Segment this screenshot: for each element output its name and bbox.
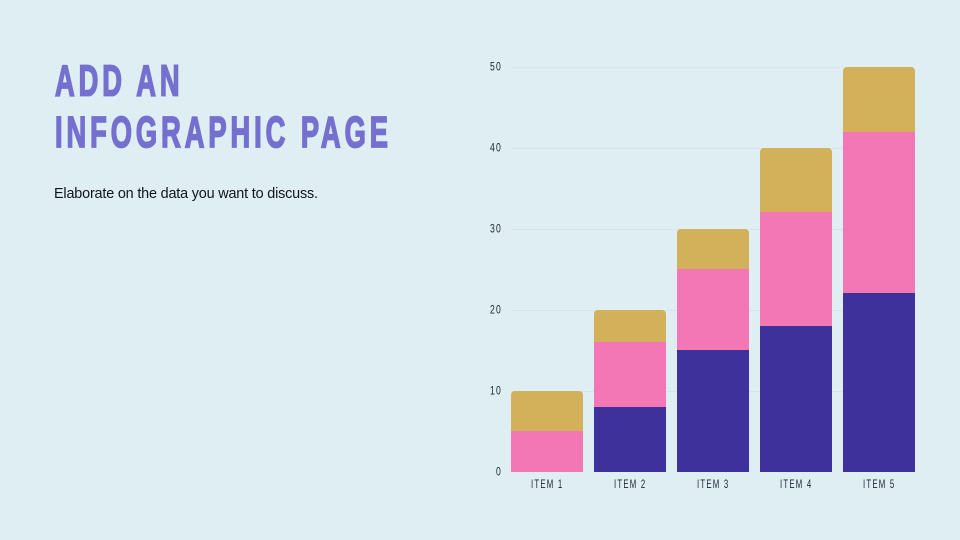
title: ADD AN (55, 56, 180, 105)
bar: item 3 (677, 229, 749, 472)
stacked bar chart (490, 61, 915, 492)
x axis labels: ITEM 4 (780, 479, 811, 492)
bar: item 1 (511, 391, 583, 472)
x axis labels: ITEM 2 (614, 479, 645, 492)
subtitle text: Elaborate on the data you want to discuss. (54, 186, 318, 202)
y axis labels: 20 (490, 304, 501, 317)
title: INFOGRAPHIC PAGE (55, 107, 388, 157)
bar: item 4 (760, 148, 832, 472)
y axis labels (490, 61, 501, 479)
y axis labels: 30 (490, 223, 501, 236)
y axis labels: 0 (496, 466, 501, 479)
title (55, 56, 388, 157)
bar: item 2 (594, 310, 666, 472)
bar: item 5 (843, 67, 915, 472)
y axis labels: 50 (490, 61, 501, 74)
y axis labels: 10 (490, 385, 501, 398)
x axis labels: ITEM 1 (531, 479, 562, 492)
x axis labels: ITEM 5 (863, 479, 894, 492)
y axis labels: 40 (490, 142, 501, 155)
x axis labels: ITEM 3 (697, 479, 728, 492)
x axis labels (531, 479, 894, 492)
